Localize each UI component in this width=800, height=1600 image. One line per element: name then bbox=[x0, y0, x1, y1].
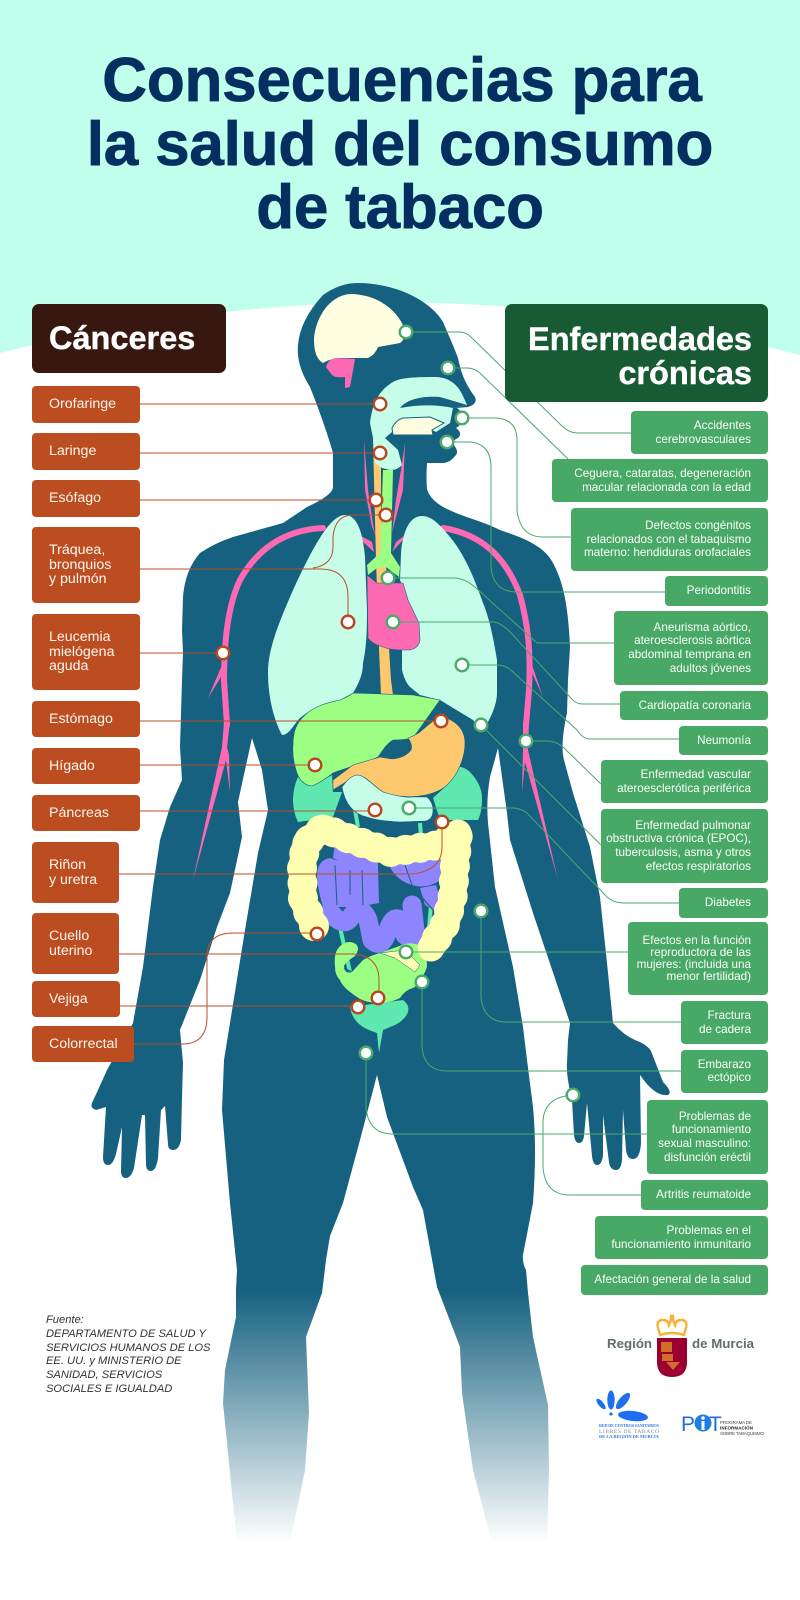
cancer label: Laringe: Laringe bbox=[49, 443, 96, 459]
disease label: Fractura de cadera: Fractura bbox=[707, 1009, 751, 1022]
disease label: Problemas sexuales: funcionamiento bbox=[672, 1123, 751, 1136]
cancer label: Vejiga bbox=[32, 981, 120, 1017]
disease label: Periodontitis bbox=[665, 576, 768, 606]
cancer label: Laringe bbox=[32, 433, 140, 470]
disease label: Efectos reproductivos bbox=[628, 922, 768, 995]
disease label: Aneurisma aórtico: Aneurisma aórtico, bbox=[654, 621, 751, 634]
logo: PIT programa de información: T bbox=[709, 1413, 722, 1436]
human body silhouette bbox=[92, 283, 670, 1543]
logo: PIT programa de información: INFORMACIÓN bbox=[720, 1424, 753, 1430]
logo: PIT programa de información: SOBRE TABAQUISMO bbox=[720, 1431, 764, 1436]
cancer label: Tráquea: y pulmón bbox=[49, 571, 107, 587]
disease label: Artritis reumatoide bbox=[641, 1180, 768, 1210]
disease label: Cardiopatía coronaria: Cardiopatía coronaria bbox=[639, 699, 751, 712]
disease label: Accidentes cerebrovasculares: cerebrovasculares bbox=[656, 432, 751, 446]
cancer label: Esófago: Esófago bbox=[49, 490, 101, 506]
cancer label: Páncreas bbox=[32, 795, 140, 831]
pelvic organs bbox=[335, 942, 427, 1003]
cancer label: Cuello uterino: uterino bbox=[49, 942, 92, 958]
cancer label: Tráquea: Tráquea, bbox=[49, 542, 105, 558]
mint header background bbox=[0, 0, 800, 355]
disease label: EPOC: Enfermedad pulmonar bbox=[635, 819, 751, 832]
heading: Cánceres bbox=[32, 304, 226, 373]
colon bbox=[302, 828, 458, 948]
disease label: Problemas sexuales: disfunción eréctil bbox=[664, 1151, 751, 1164]
disease label: Neumonía bbox=[679, 726, 768, 755]
small intestine bbox=[317, 843, 442, 943]
source note: DEPARTAMENTO DE SALUD Y bbox=[46, 1328, 206, 1340]
source note: EE. UU. y MINISTERIO DE bbox=[46, 1355, 182, 1367]
disease label: Defectos congénitos: relacionados con el tabaquismo bbox=[587, 533, 751, 546]
cancer label: Leucemia bbox=[32, 614, 140, 690]
logo: Red de Centros Sanitarios: LIBRES DE TABACO bbox=[599, 1429, 659, 1435]
heading: Enfermedades crónicas: Enfermedades bbox=[528, 320, 752, 356]
disease label: Defectos congénitos: materno: hendiduras orofaciales bbox=[584, 546, 751, 559]
disease label: Efectos reproductivos: reproductora de las bbox=[650, 946, 751, 958]
cancer label: Estómago bbox=[32, 701, 140, 737]
logo: Red de Centros Sanitarios bbox=[595, 1390, 660, 1439]
kidneys bbox=[293, 767, 482, 822]
disease label: Problemas inmunitarios: Problemas en el bbox=[667, 1224, 751, 1237]
disease label: Accidentes cerebrovasculares: Accidentes bbox=[694, 419, 751, 432]
cancer label: Leucemia: aguda bbox=[49, 658, 88, 674]
cancer label: Vejiga: Vejiga bbox=[49, 991, 88, 1007]
bladder bbox=[350, 1000, 408, 1053]
disease label: EPOC bbox=[601, 809, 768, 883]
disease label: Accidentes cerebrovasculares bbox=[631, 411, 768, 454]
disease label: Artritis reumatoide: Artritis reumatoide bbox=[656, 1188, 751, 1201]
stomach bbox=[333, 717, 465, 797]
cancer label: Riñon: Riñon bbox=[49, 857, 86, 873]
cancer connector lines bbox=[119, 404, 442, 1044]
cancer label: Tráquea bbox=[32, 527, 140, 603]
logo: PIT programa de información: P bbox=[681, 1413, 695, 1436]
cancer label: Hígado: Hígado bbox=[49, 758, 95, 774]
disease label: Afectación general: Afectación general de la salud bbox=[594, 1273, 751, 1286]
disease label: Fractura de cadera: de cadera bbox=[699, 1022, 751, 1036]
cancer label: Riñon bbox=[32, 842, 119, 903]
disease label: Afectación general bbox=[581, 1265, 768, 1295]
ureters bbox=[339, 810, 431, 972]
disease label: Enfermedad vascular: ateroesclerótica periférica bbox=[617, 782, 751, 794]
disease label: Defectos congénitos bbox=[571, 508, 768, 571]
disease label: Problemas sexuales bbox=[647, 1100, 768, 1174]
chronic disease connector lines bbox=[366, 332, 681, 1195]
cancer label: Cuello uterino: Cuello bbox=[49, 928, 89, 944]
logo: Región de Murcia: Región bbox=[607, 1336, 652, 1351]
disease label: Ceguera bbox=[552, 459, 768, 502]
cancer label: Tráquea: bronquios bbox=[49, 557, 111, 573]
cancer label: Esófago bbox=[32, 480, 140, 517]
source note bbox=[46, 1314, 210, 1395]
cancer label: Orofaringe bbox=[32, 386, 140, 423]
cancer label: Páncreas: Páncreas bbox=[49, 805, 109, 821]
disease label: Efectos reproductivos: mujeres: (incluida una bbox=[637, 958, 751, 970]
heading: Enfermedades crónicas: crónicas bbox=[618, 354, 752, 390]
disease label: Diabetes: Diabetes bbox=[705, 896, 751, 909]
disease label: Problemas sexuales: sexual masculino: bbox=[658, 1137, 751, 1150]
trachea and bronchi bbox=[367, 470, 400, 577]
cerebellum bbox=[326, 358, 355, 388]
disease label: Aneurisma aórtico: adultos jóvenes bbox=[670, 662, 751, 675]
logo: PIT programa de información: PROGRAMA DE bbox=[720, 1420, 752, 1425]
disease label: Efectos reproductivos: Efectos en la función bbox=[642, 934, 751, 946]
disease label: Embarazo ectópico: ectópico bbox=[707, 1070, 751, 1084]
logo: Región de Murcia: de Murcia bbox=[692, 1336, 755, 1351]
cancer label: Colorrectal bbox=[32, 1026, 134, 1062]
cancer label: Estómago: Estómago bbox=[49, 711, 113, 727]
cancer label: Riñon: y uretra bbox=[49, 872, 97, 888]
cancer label: Colorrectal: Colorrectal bbox=[49, 1036, 118, 1052]
source note: Fuente: bbox=[46, 1314, 84, 1326]
disease label: Ceguera: macular relacionada con la edad bbox=[582, 480, 751, 494]
cancer label: Hígado bbox=[32, 748, 140, 784]
heart bbox=[367, 575, 420, 650]
chronic disease markers bbox=[360, 326, 579, 1101]
source note: SERVICIOS HUMANOS DE LOS bbox=[46, 1342, 210, 1354]
pancreas bbox=[342, 775, 433, 822]
cancer label: Leucemia: mielógena bbox=[49, 644, 114, 660]
arteries: arms and neck bbox=[224, 528, 530, 725]
liver bbox=[293, 693, 440, 786]
disease label: Defectos congénitos: Defectos congénitos bbox=[645, 519, 751, 532]
disease label: Diabetes bbox=[679, 888, 768, 918]
source note: SANIDAD, SERVICIOS bbox=[46, 1369, 162, 1381]
disease label: EPOC: tuberculosis, asma y otros bbox=[615, 846, 751, 859]
oesophagus bbox=[373, 440, 393, 695]
organs bbox=[193, 294, 558, 1053]
logo: PIT programa de información bbox=[681, 1413, 764, 1436]
disease label: Neumonía: Neumonía bbox=[697, 734, 751, 747]
disease label: Enfermedad vascular bbox=[601, 760, 768, 803]
heading: Enfermedades crónicas bbox=[505, 304, 768, 402]
title: de tabaco bbox=[256, 173, 544, 242]
disease label: EPOC: obstructiva crónica (EPOC), bbox=[606, 832, 751, 845]
disease label: Aneurisma aórtico: ateroesclerosis aórtica bbox=[634, 634, 751, 647]
disease label: Problemas sexuales: Problemas de bbox=[679, 1110, 751, 1123]
disease label: Enfermedad vascular: Enfermedad vascular bbox=[641, 768, 751, 781]
disease label: Periodontitis: Periodontitis bbox=[687, 584, 751, 597]
logo: Región de Murcia bbox=[607, 1316, 755, 1377]
disease label: Embarazo ectópico bbox=[681, 1050, 768, 1093]
title: la salud del consumo bbox=[87, 110, 713, 179]
title: Consecuencias para bbox=[102, 46, 702, 115]
disease label: Problemas inmunitarios: funcionamiento inmunitario bbox=[611, 1238, 751, 1250]
title bbox=[87, 46, 713, 242]
logo: Red de Centros Sanitarios: DE LA REGIÓN DE MURCIA bbox=[599, 1434, 660, 1439]
disease label: Fractura de cadera bbox=[681, 1001, 768, 1044]
cancer label: Leucemia: Leucemia bbox=[49, 629, 111, 645]
disease label: Aneurisma aórtico bbox=[614, 611, 768, 685]
disease label: Problemas inmunitarios bbox=[595, 1216, 768, 1259]
disease label: Ceguera: Ceguera, cataratas, degeneración bbox=[574, 467, 751, 480]
disease label: Cardiopatía coronaria bbox=[620, 691, 768, 720]
lungs bbox=[268, 515, 367, 735]
cancer label: Orofaringe: Orofaringe bbox=[49, 396, 116, 412]
cancer markers bbox=[217, 398, 448, 1013]
disease label: EPOC: efectos respiratorios bbox=[646, 860, 751, 873]
disease label: Efectos reproductivos: menor fertilidad) bbox=[667, 970, 751, 982]
disease label: Embarazo ectópico: Embarazo bbox=[698, 1058, 751, 1071]
tongue bbox=[392, 417, 444, 435]
disease label: Aneurisma aórtico: abdominal temprana en bbox=[628, 648, 751, 661]
heading: Cánceres: Cánceres bbox=[49, 320, 195, 356]
cancer label: Cuello uterino bbox=[32, 913, 119, 974]
source note: SOCIALES E IGUALDAD bbox=[46, 1383, 172, 1395]
oral and nasal cavity bbox=[370, 377, 467, 470]
logo: Red de Centros Sanitarios: RED DE CENTROS SANITARIOS bbox=[599, 1423, 660, 1428]
brain bbox=[314, 294, 405, 363]
